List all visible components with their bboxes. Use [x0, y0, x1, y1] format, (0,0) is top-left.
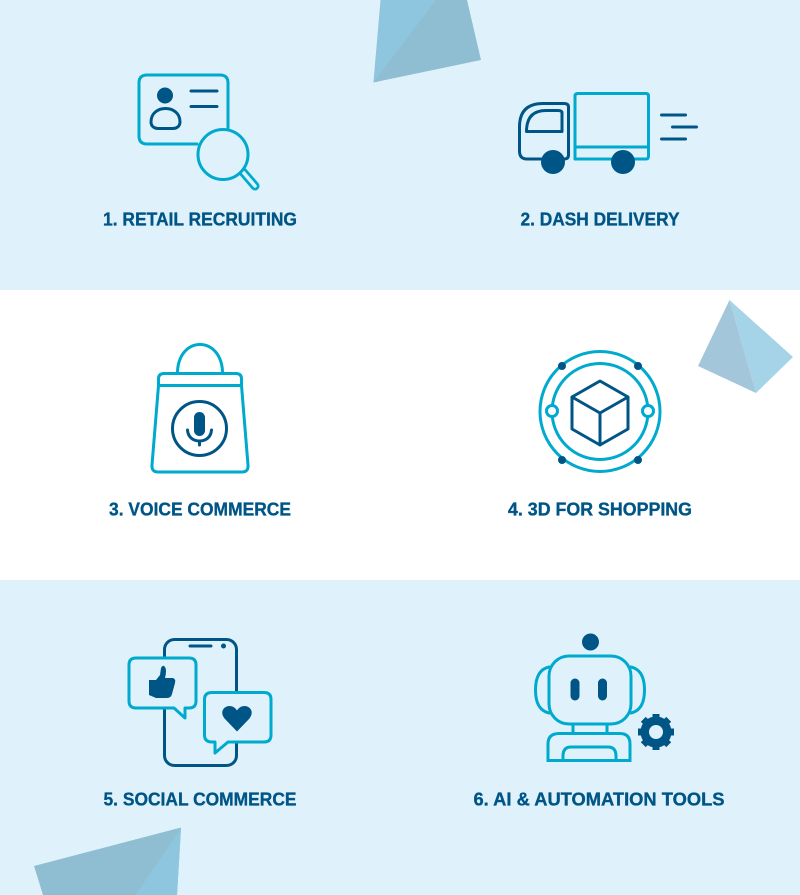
panel: middle row	[0, 290, 800, 580]
decorative polygon: bottom	[34, 828, 181, 895]
decorative polygon: pyramid	[698, 300, 793, 393]
heading: dash delivery: 2. DASH DELIVERY	[520, 210, 680, 230]
heading: voice commerce: 3. VOICE COMMERCE	[109, 500, 291, 520]
heading: AI and automation tools: 6. AI & AUTOMATION TOOLS	[474, 790, 724, 810]
icon: phone with social bubbles	[129, 640, 271, 766]
icon: shopping bag with microphone	[152, 344, 248, 472]
icon: 3D cube in rings	[540, 352, 660, 472]
heading: 3D for shopping: 4. 3D FOR SHOPPING	[508, 500, 692, 520]
icon: robot with gear	[536, 634, 674, 760]
panel: bottom row	[0, 580, 800, 895]
icon: candidate card with magnifier	[139, 75, 255, 186]
decorative polygon: top	[374, 0, 481, 82]
heading: retail recruiting: 1. RETAIL RECRUITING	[103, 210, 297, 230]
heading: social commerce: 5. SOCIAL COMMERCE	[104, 790, 296, 810]
panel: top row	[0, 0, 800, 290]
icon: delivery truck	[520, 94, 696, 174]
